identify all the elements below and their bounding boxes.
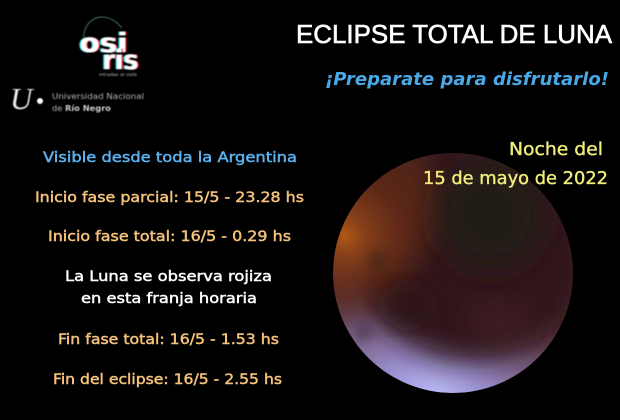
logo wordmark cyan shadow: osi: [78, 28, 126, 59]
schedule text: [35, 150, 304, 388]
red moon note line two: en esta franja horaria: [81, 291, 257, 307]
logo arc: [84, 17, 122, 42]
partial phase start: Inicio fase parcial: 15/5 - 23.28 hs: [35, 190, 304, 206]
logo wordmark red shadow: osi: [81, 28, 129, 59]
eclipse end: Fin del eclipse: 16/5 - 2.55 hs: [53, 372, 282, 388]
logo second line: ris: [102, 45, 138, 76]
date line two: 15 de mayo de 2022: [423, 169, 608, 189]
date callout: [423, 140, 608, 189]
visibility: Visible desde toda la Argentina: [43, 150, 297, 166]
U dot: [37, 98, 43, 104]
logo tagline: miradas al cielo: [99, 72, 137, 78]
U mark: U: [10, 81, 35, 116]
logo wordmark: osi: [80, 28, 128, 59]
logo: Universidad Nacional de Río Negro: [10, 81, 144, 116]
total phase start: Inicio fase total: 16/5 - 0.29 hs: [48, 229, 291, 245]
logo: Osiris: [78, 17, 140, 78]
red moon note line one: La Luna se observa rojiza: [65, 269, 272, 285]
logo second line cyan shadow: ris: [101, 45, 137, 76]
university name line one: Universidad Nacional: [52, 92, 144, 101]
university name line two: de Río Negro: [52, 104, 112, 113]
date line one: Noche del: [509, 140, 603, 160]
subtitle: ¡Preparate para disfrutarlo!: [325, 69, 609, 90]
moon photo: [333, 153, 573, 393]
total phase end: Fin fase total: 16/5 - 1.53 hs: [58, 332, 279, 348]
title: ECLIPSE TOTAL DE LUNA: [296, 19, 613, 49]
logo second line red shadow: ris: [104, 45, 140, 76]
